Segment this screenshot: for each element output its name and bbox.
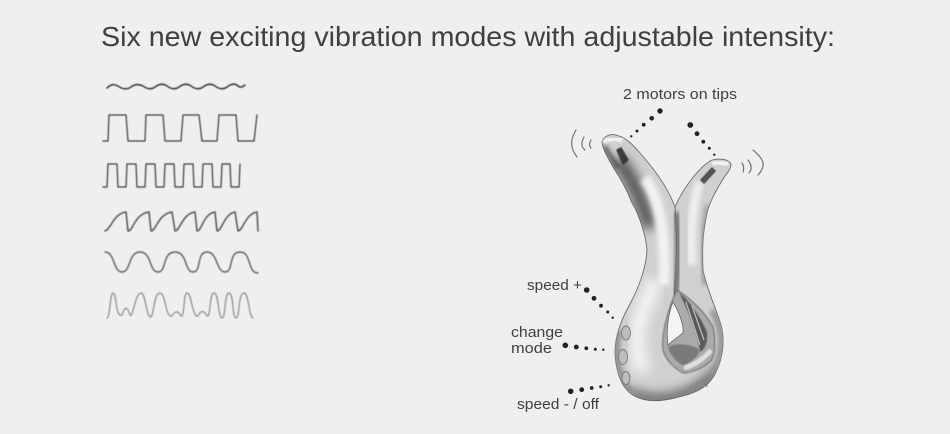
device: maker mark <box>690 379 708 391</box>
buttons on device <box>618 326 630 384</box>
dotted leader: change mode <box>562 342 604 351</box>
label: 2 motors on tips: 2 motors on tips <box>623 86 737 103</box>
shading: right edge <box>703 205 708 285</box>
waveform 2: wide square pulses <box>103 115 257 141</box>
shading: body highlight <box>637 280 655 372</box>
title: Six new exciting vibration modes with adjustable intensity: <box>101 21 835 52</box>
labelled device illustration <box>572 130 763 401</box>
label: speed - / off: speed - / off <box>517 396 600 413</box>
shading: neck crease <box>675 212 678 295</box>
shading: left arm highlight <box>645 178 664 285</box>
device silhouette with shading <box>602 135 731 401</box>
shading: right body edge <box>712 310 721 374</box>
dotted leader: speed - <box>568 384 610 394</box>
waveform 4: sawtooth curves <box>105 212 258 231</box>
label: change mode: change <box>511 324 563 341</box>
shading: left arm dark band <box>618 160 650 228</box>
label: change mode: mode <box>511 340 552 357</box>
vibration arcs: left <box>572 130 591 157</box>
dotted leader: speed + <box>584 287 614 319</box>
button: speed + <box>622 326 630 340</box>
crease between arms <box>674 207 676 300</box>
dotted leader: right motor <box>687 122 716 156</box>
shading: left tip <box>604 139 622 143</box>
motor: left tip <box>617 148 628 164</box>
shading: right arm highlight <box>691 182 700 265</box>
waveform 1: gentle ripple <box>107 84 245 89</box>
shading: right tip <box>712 162 728 165</box>
button: change mode <box>618 350 628 364</box>
device: inner recess <box>663 290 715 373</box>
vibration arcs: right <box>742 150 763 175</box>
waveform 5: rounded waves <box>105 252 258 273</box>
device: hole in loop <box>667 302 683 345</box>
motor: right tip <box>701 168 715 183</box>
waveform 3: narrow square pulses <box>103 164 240 187</box>
label: speed +: speed + <box>527 277 582 294</box>
shading: left body edge <box>617 330 632 393</box>
button: speed - <box>622 372 630 384</box>
waveform chart: six vibration modes <box>103 84 258 318</box>
shading: bottom <box>630 370 717 399</box>
dotted leader: left motor <box>630 108 663 138</box>
waveform 6: irregular bumps <box>107 293 253 318</box>
